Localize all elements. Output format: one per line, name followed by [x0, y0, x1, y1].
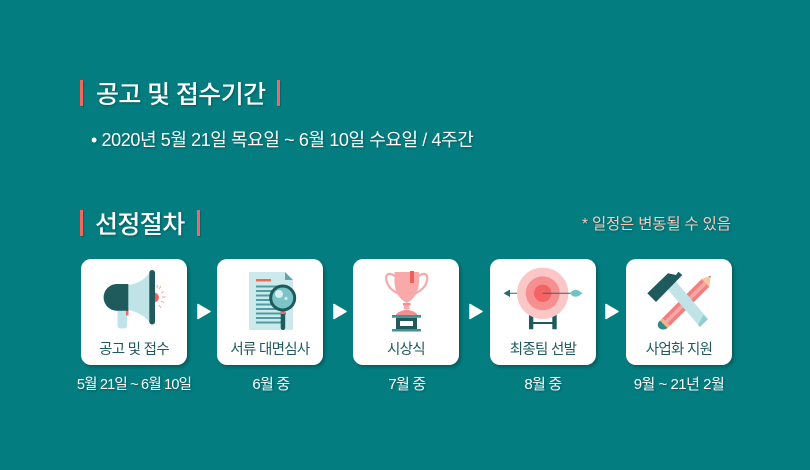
arrow 1 — [197, 304, 211, 320]
label: 서류 대면심사 — [230, 342, 310, 358]
panel: step 4 final team selection — [490, 259, 596, 365]
date: step 3: 7월 중 — [388, 376, 426, 393]
heading: selection process: 선정절차 — [95, 211, 185, 239]
panel: step 3 award ceremony — [353, 259, 459, 365]
heading: application period: 공고 및 접수기간 — [96, 81, 266, 109]
panel: step 1 application — [81, 259, 187, 365]
date: step 2: 6월 중 — [252, 376, 290, 393]
text: application period dates: • 2020년 5월 21일 목요일 ~ 6월 10일 수요일 / 4주간 — [91, 130, 473, 150]
label: 시상식 — [387, 342, 425, 358]
panel: step 2 document review — [217, 259, 323, 365]
date: step 4: 8월 중 — [524, 376, 562, 393]
label: 최종팀 선발 — [510, 342, 576, 358]
arrow 2 — [333, 304, 347, 320]
arrow 3 — [469, 304, 483, 320]
arrow 4 — [605, 304, 619, 320]
icon: trophy — [385, 271, 428, 332]
icon: hammer and pencil — [647, 272, 711, 330]
icon: target with arrow — [504, 268, 582, 330]
date: step 5: 9월 ~ 21년 2월 — [634, 376, 724, 393]
icon: document with magnifier — [249, 272, 296, 330]
date: step 1: 5월 21일 ~ 6월 10일 — [77, 377, 191, 393]
note: schedule may change: * 일정은 변동될 수 있음 — [582, 216, 731, 233]
icon: megaphone — [104, 270, 166, 328]
label: 공고 및 접수 — [99, 342, 169, 358]
label: 사업화 지원 — [646, 342, 712, 358]
panel: step 5 business support — [626, 259, 732, 365]
